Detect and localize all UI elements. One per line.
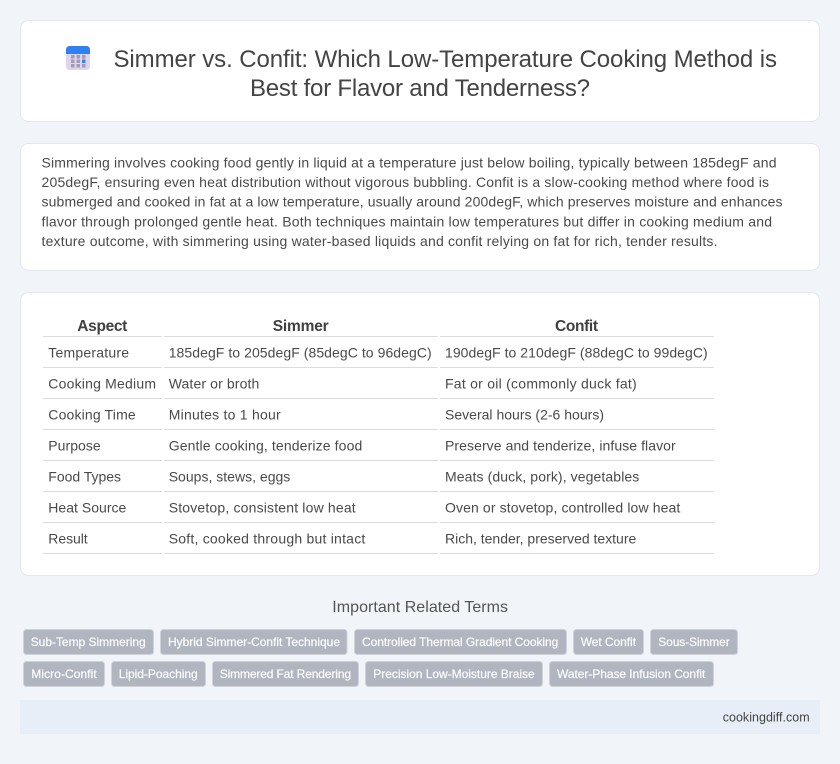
row: cooking medium xyxy=(48,376,637,392)
tag: Controlled Thermal Gradient Cooking xyxy=(362,635,558,649)
row: temperature xyxy=(48,345,708,361)
tag: Water-Phase Infusion Confit xyxy=(557,667,706,681)
tag xyxy=(160,630,347,654)
row: cooking medium: Fat or oil (commonly duck fat) xyxy=(445,376,637,392)
row: temperature: 185degF to 205degF (85degC to 96degC) xyxy=(169,345,432,361)
row: food types: Food Types xyxy=(48,469,121,485)
row: heat source: Stovetop, consistent low heat xyxy=(169,500,356,516)
heading: important related terms: Important Related Terms xyxy=(332,599,508,616)
text block: description paragraph: flavor through prolonged gentle heat. Both techniques maintain low temperatures but differ in cooking medium and xyxy=(42,213,772,229)
tag xyxy=(366,662,542,686)
panel: title card xyxy=(20,20,820,122)
row: cooking medium: Cooking Medium xyxy=(48,376,156,392)
text block: description paragraph: Simmering involves cooking food gently in liquid at a temperature just below boiling, typically between 185degF and xyxy=(42,154,776,170)
text block: description paragraph xyxy=(42,154,782,249)
footer: cookingdiff.com xyxy=(723,710,810,724)
icon: calendar xyxy=(66,46,90,70)
tag: Precision Low-Moisture Braise xyxy=(373,667,535,681)
row: cooking time: Minutes to 1 hour xyxy=(169,407,281,423)
tag: Wet Confit xyxy=(581,635,637,649)
row: food types xyxy=(48,469,639,485)
text block: description paragraph: texture outcome, with simmering using water-based liquids and confit relying on fat for rich, tender results. xyxy=(42,233,718,249)
tag xyxy=(574,630,644,654)
row: food types: Meats (duck, pork), vegetables xyxy=(445,469,639,485)
row: cooking medium: Water or broth xyxy=(169,376,259,392)
table header: Aspect xyxy=(77,318,127,335)
row: cooking time: Cooking Time xyxy=(48,407,136,423)
row: purpose: Preserve and tenderize, infuse flavor xyxy=(445,438,676,454)
row: temperature: 190degF to 210degF (88degC to 99degC) xyxy=(445,345,708,361)
tag xyxy=(24,630,154,654)
tag xyxy=(650,630,738,654)
row: result: Rich, tender, preserved texture xyxy=(445,531,637,547)
related terms tags xyxy=(24,630,738,686)
title xyxy=(114,46,777,102)
table header xyxy=(77,318,598,335)
text block: description paragraph: submerged and cooked in fat at a low temperature, usually around 200degF, which preserves moisture and enhances xyxy=(42,194,782,210)
title: Best for Flavor and Tenderness? xyxy=(250,75,590,102)
row: heat source: Oven or stovetop, controlled low heat xyxy=(445,500,680,516)
tag: Simmered Fat Rendering xyxy=(220,667,351,681)
table header: Simmer xyxy=(273,318,329,335)
tag: Lipid-Poaching xyxy=(119,667,198,681)
row: food types: Soups, stews, eggs xyxy=(169,469,290,485)
title: Simmer vs. Confit: Which Low-Temperature Cooking Method is xyxy=(114,46,777,73)
row: result: Result xyxy=(48,531,88,547)
row: purpose xyxy=(48,438,676,454)
tag: Hybrid Simmer-Confit Technique xyxy=(168,635,340,649)
row: heat source: Heat Source xyxy=(48,500,127,516)
tag xyxy=(24,662,104,686)
table header: Confit xyxy=(555,318,598,335)
row: cooking time xyxy=(48,407,604,423)
tag xyxy=(550,662,714,686)
row: cooking time: Several hours (2-6 hours) xyxy=(445,407,604,423)
row: purpose: Gentle cooking, tenderize food xyxy=(169,438,362,454)
panel: description xyxy=(20,144,820,270)
footer xyxy=(20,700,820,734)
tag xyxy=(212,662,358,686)
tag xyxy=(112,662,206,686)
row: purpose: Purpose xyxy=(48,438,101,454)
text block: description paragraph: 205degF, ensuring even heat distribution without vigorous bubbling. Confit is a slow-cooking method where food is xyxy=(42,174,769,190)
tag: Sub-Temp Simmering xyxy=(31,635,146,649)
tag: Sous-Simmer xyxy=(658,635,730,649)
row: result xyxy=(48,531,637,547)
tag xyxy=(354,630,566,654)
row: temperature: Temperature xyxy=(48,345,129,361)
row: heat source xyxy=(48,500,680,516)
row: result: Soft, cooked through but intact xyxy=(169,531,365,547)
panel: comparison table xyxy=(20,292,820,576)
tag: Micro-Confit xyxy=(31,667,97,681)
